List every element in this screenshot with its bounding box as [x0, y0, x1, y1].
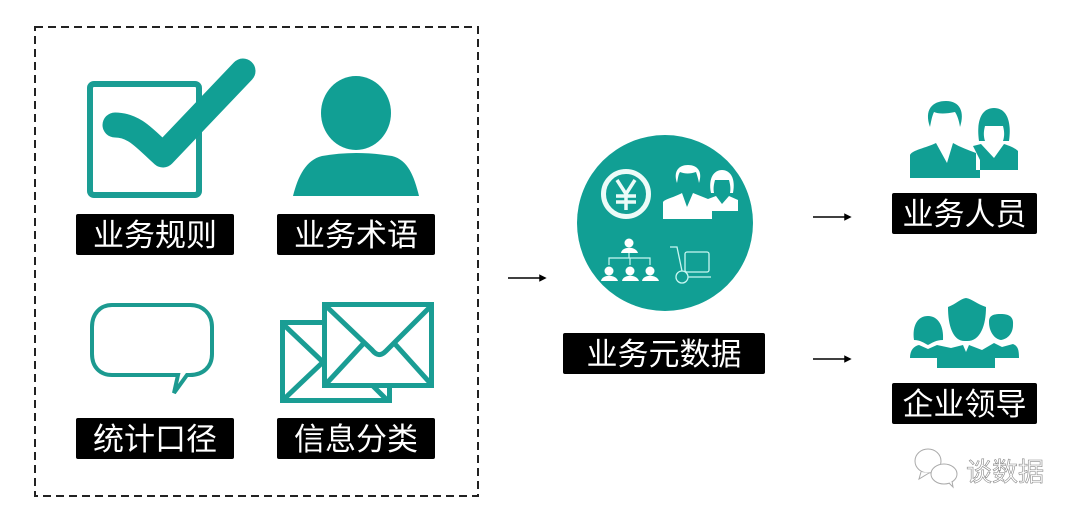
icon: hand truck	[670, 247, 711, 283]
icon: person	[293, 76, 419, 196]
icon: business staff	[910, 101, 1018, 178]
label: business rules: 业务规则	[93, 218, 217, 253]
label: business staff: 业务人员	[902, 197, 1026, 232]
label: business metadata	[563, 333, 765, 374]
watermark	[915, 449, 1044, 487]
icon: two people in circle	[663, 165, 738, 219]
label: business metadata: 业务元数据	[586, 337, 742, 372]
watermark text: 谈数据	[966, 457, 1044, 487]
label: business terms	[277, 214, 435, 255]
label: information classification: 信息分类	[294, 422, 418, 457]
icon: leaders	[910, 298, 1019, 368]
arrow: group to metadata	[508, 276, 545, 280]
label: company leaders: 企业领导	[902, 387, 1026, 422]
icon: metadata circle	[577, 135, 753, 311]
label: information classification	[277, 418, 435, 459]
arrow: metadata to leaders	[813, 356, 850, 362]
icon: speech bubble	[92, 305, 212, 393]
label: statistical scope: 统计口径	[93, 422, 217, 457]
label: business terms: 业务术语	[294, 218, 418, 253]
icon: checkbox with check mark	[90, 71, 243, 195]
label: statistical scope	[76, 418, 234, 459]
icon: yuan coin	[604, 172, 648, 216]
icon: envelopes	[282, 304, 432, 400]
icon: chat bubbles	[915, 449, 957, 487]
icon: org chart	[601, 238, 659, 281]
panel: dashed group frame	[35, 27, 478, 496]
arrow: metadata to business staff	[813, 214, 850, 220]
label: business rules	[76, 214, 234, 255]
